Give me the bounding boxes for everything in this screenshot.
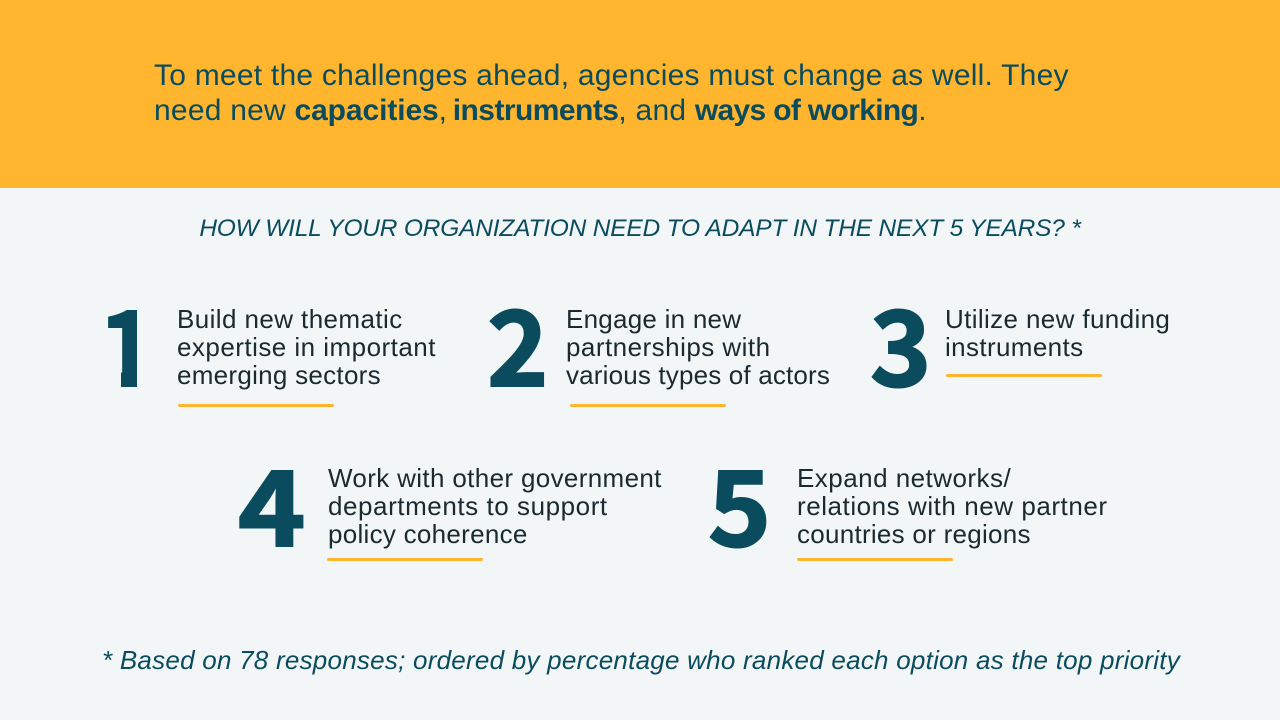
item 1 underline (178, 404, 334, 407)
header statement: To meet the challenges ahead, agencies must change as well. They (154, 59, 1069, 92)
item 5 (708, 425, 1108, 576)
item 3 underline (946, 374, 1102, 377)
item 1 (108, 304, 436, 407)
item 4 text: policy coherence (328, 519, 528, 549)
item 3 (870, 265, 1170, 416)
number 5: 5 (708, 425, 771, 576)
item 2 text: Engage in new (566, 304, 741, 334)
item 5 text: countries or regions (797, 519, 1031, 549)
item 2 text: partnerships with (566, 332, 771, 362)
item 3 text: Utilize new funding (945, 304, 1170, 334)
number 4: 4 (238, 425, 306, 576)
item 1 text: Build new thematic (177, 304, 403, 334)
item 4 underline (327, 558, 483, 561)
item 2 (487, 265, 830, 416)
item 5 text (797, 463, 1108, 549)
item 1 text: expertise in important (177, 332, 436, 362)
item 4 text (328, 463, 662, 549)
item 2 text (566, 304, 830, 390)
item 2 text: various types of actors (566, 360, 830, 390)
item 5 underline (797, 558, 953, 561)
header statement (154, 59, 1069, 127)
number 1: 1 (98, 265, 159, 416)
item 3 text: instruments (945, 332, 1083, 362)
item 4 text: departments to support (328, 491, 608, 521)
number 2: 2 (487, 265, 548, 416)
footnote: * Based on 78 responses; ordered by percentage who ranked each option as the top priority (102, 645, 1180, 675)
item 1 text: emerging sectors (177, 360, 381, 390)
item 4 (238, 425, 662, 576)
item 2 underline (570, 404, 726, 407)
number 3: 3 (870, 265, 931, 416)
header band (0, 0, 1280, 188)
item 1 text (177, 304, 436, 390)
item 5 text: Expand networks/ (797, 463, 1011, 493)
item 5 text: relations with new partner (797, 491, 1108, 521)
survey question heading: HOW WILL YOUR ORGANIZATION NEED TO ADAPT IN THE NEXT 5 YEARS? * (199, 215, 1081, 242)
item 4 text: Work with other government (328, 463, 662, 493)
header statement: need new capacities, instruments, and ways of working. (154, 94, 927, 127)
item 3 text (945, 304, 1170, 362)
